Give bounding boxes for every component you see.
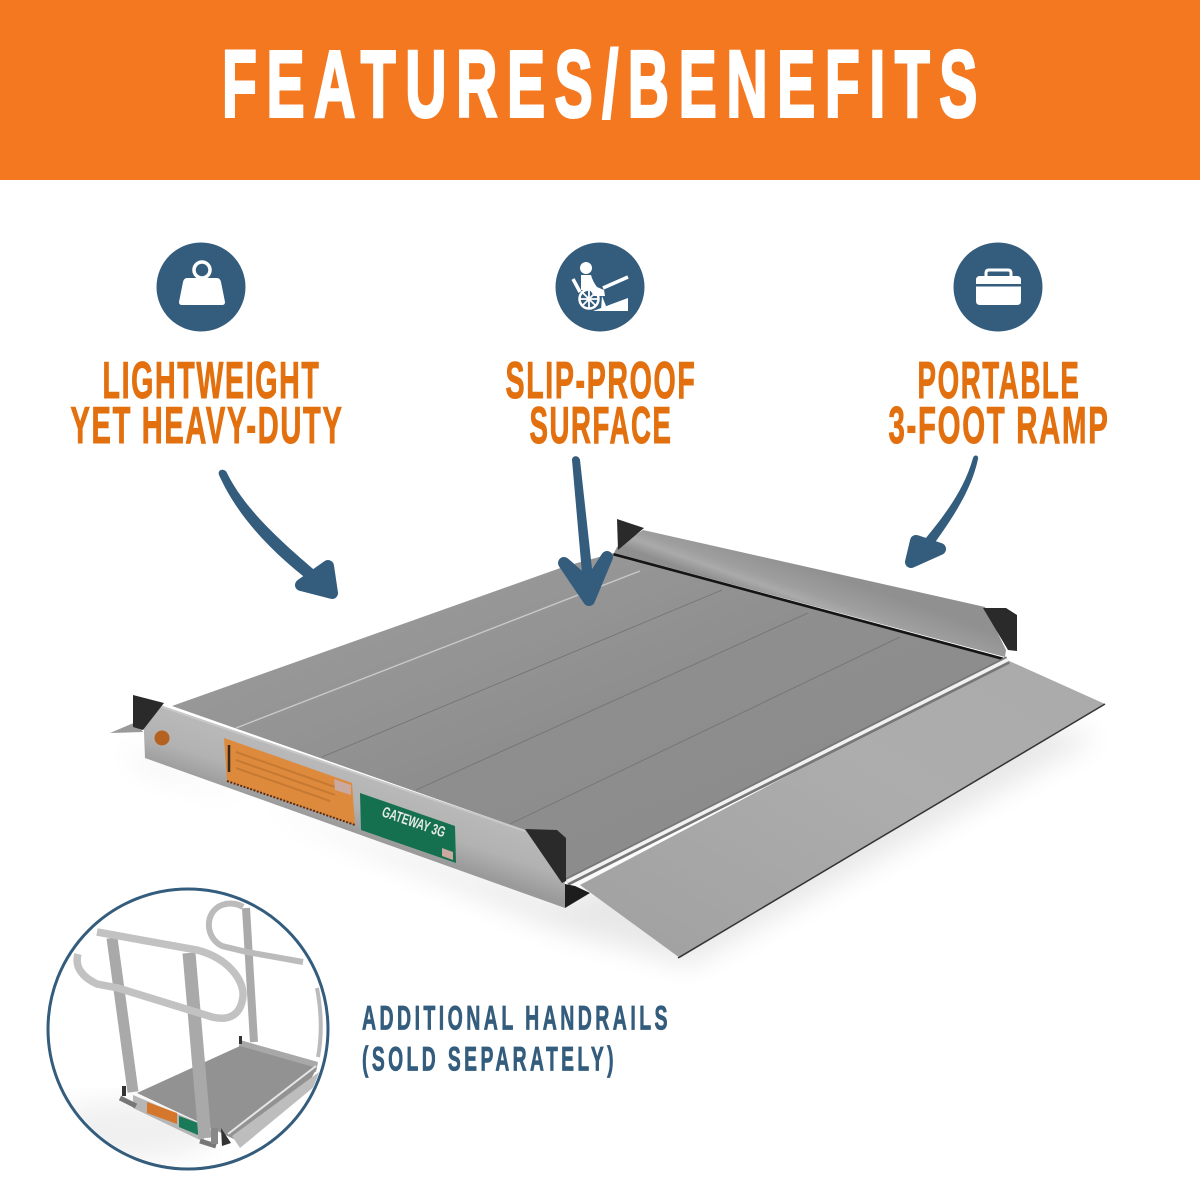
icon: weight — [156, 242, 246, 332]
icon: toolbox — [954, 242, 1042, 332]
gateway label: GATEWAY 3G — [380, 804, 448, 841]
back post — [246, 908, 254, 1042]
deck surface — [172, 553, 1005, 880]
heading: lightweight yet heavy-duty: YET HEAVY-DUTY — [70, 397, 344, 455]
left lip — [110, 722, 143, 733]
caption: additional handrails: (SOLD SEPARATELY) — [362, 1040, 617, 1078]
heading: lightweight yet heavy-duty — [70, 352, 344, 455]
heading: slip-proof surface: SURFACE — [530, 397, 672, 455]
header banner — [0, 0, 1200, 180]
black corner caps — [133, 519, 1017, 883]
orange bolt cap — [154, 730, 170, 746]
ramp product illustration — [110, 519, 1105, 965]
caption: additional handrails — [362, 1000, 671, 1078]
heading: portable 3-foot ramp — [888, 352, 1110, 455]
front posts — [112, 938, 133, 1092]
brackets and corner cap — [120, 1098, 216, 1146]
arrow: slip-proof — [564, 456, 607, 600]
front top rail — [77, 932, 243, 1018]
front side panel — [143, 705, 565, 908]
deck seams — [236, 571, 900, 824]
arrow: portable — [911, 455, 978, 562]
fold-out ramp lip — [580, 660, 1105, 958]
inset: handrails photo circle — [40, 889, 328, 1169]
gateway label — [360, 793, 456, 863]
heading: slip-proof surface: SLIP-PROOF — [506, 352, 696, 410]
right rear edge — [317, 988, 321, 1057]
safety label — [224, 738, 355, 825]
caption: additional handrails: ADDITIONAL HANDRAILS — [362, 1000, 671, 1038]
heading: slip-proof surface — [506, 352, 696, 455]
heading: lightweight yet heavy-duty: LIGHTWEIGHT — [102, 352, 320, 410]
arrow: lightweight — [219, 470, 332, 593]
icon: wheelchair on ramp — [556, 242, 644, 332]
hinge rail — [567, 660, 1008, 882]
back flange — [614, 530, 1006, 657]
back rail — [209, 904, 303, 962]
deck — [238, 1040, 318, 1072]
